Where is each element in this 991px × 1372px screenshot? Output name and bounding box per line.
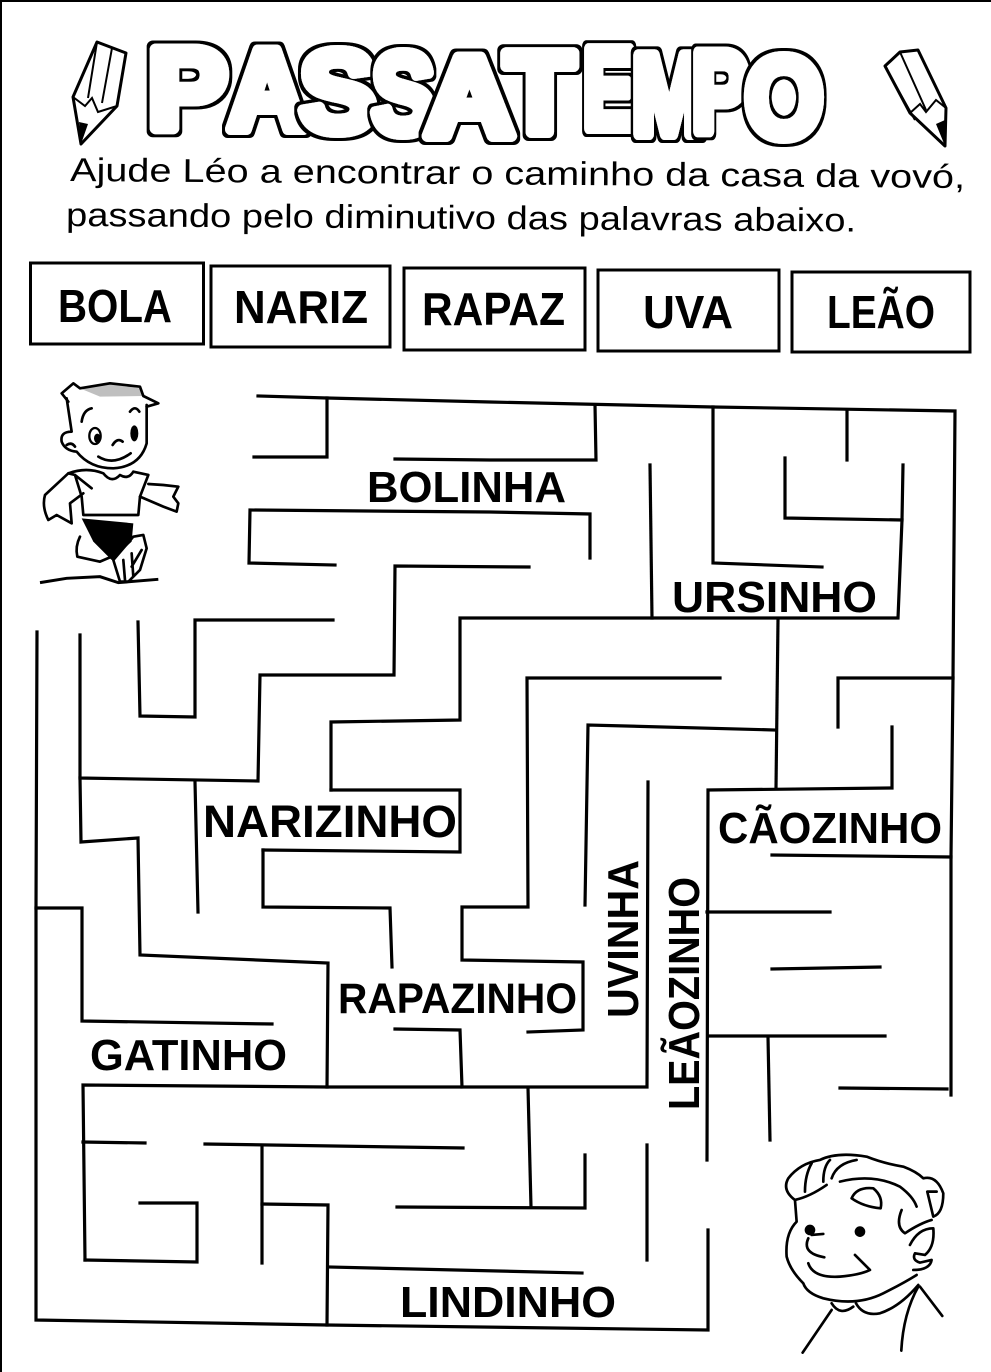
icon: grandmother	[786, 1155, 943, 1353]
title: PASSATEMPO: M	[632, 30, 706, 159]
title: PASSATEMPO: T	[505, 30, 575, 157]
maze label: GATINHO: GATINHO	[90, 1031, 287, 1080]
word box: BOLA: BOLA	[58, 280, 172, 332]
title: PASSATEMPO: O	[745, 34, 823, 161]
word box: UVA: UVA	[643, 286, 733, 338]
word box: LEÃO: LEÃO	[827, 286, 935, 338]
maze label: CÃOZINHO: CÃOZINHO	[718, 803, 942, 853]
word box: NARIZ: NARIZ	[234, 281, 368, 333]
word box: LEÃO	[792, 272, 970, 352]
maze label: LINDINHO: LINDINHO	[400, 1278, 616, 1327]
word box: NARIZ	[211, 266, 390, 347]
title: PASSATEMPO: P	[148, 25, 227, 153]
word box: UVA	[598, 270, 779, 351]
instructions text	[66, 151, 965, 239]
instructions text: passando pelo diminutivo das palavras abaixo.	[66, 196, 856, 239]
maze label: RAPAZINHO: RAPAZINHO	[338, 975, 577, 1023]
word box: RAPAZ: RAPAZ	[422, 283, 565, 335]
maze label: UVINHA: UVINHA	[599, 860, 648, 1018]
icon: boy Léo walking	[40, 383, 178, 583]
title: PASSATEMPO: S	[300, 29, 376, 156]
title: PASSATEMPO: E	[583, 25, 635, 153]
title: PASSATEMPO: A	[425, 34, 514, 161]
title: PASSATEMPO: P	[692, 29, 748, 156]
maze walls	[36, 396, 955, 1330]
maze label: BOLINHA: BOLINHA	[367, 463, 566, 512]
title: PASSATEMPO: S	[372, 31, 434, 158]
instructions text: Ajude Léo a encontrar o caminho da casa da vovó,	[70, 151, 965, 195]
icon: left pencil	[73, 42, 126, 144]
title: PASSATEMPO	[148, 25, 823, 161]
maze label: LEÃOZINHO: LEÃOZINHO	[659, 877, 709, 1110]
icon: right pencil	[885, 50, 946, 146]
word box: RAPAZ	[404, 268, 585, 350]
maze label: URSINHO: URSINHO	[672, 573, 877, 622]
word box: BOLA	[30, 263, 204, 344]
title: PASSATEMPO: A	[228, 25, 306, 154]
maze label: NARIZINHO: NARIZINHO	[203, 796, 457, 847]
